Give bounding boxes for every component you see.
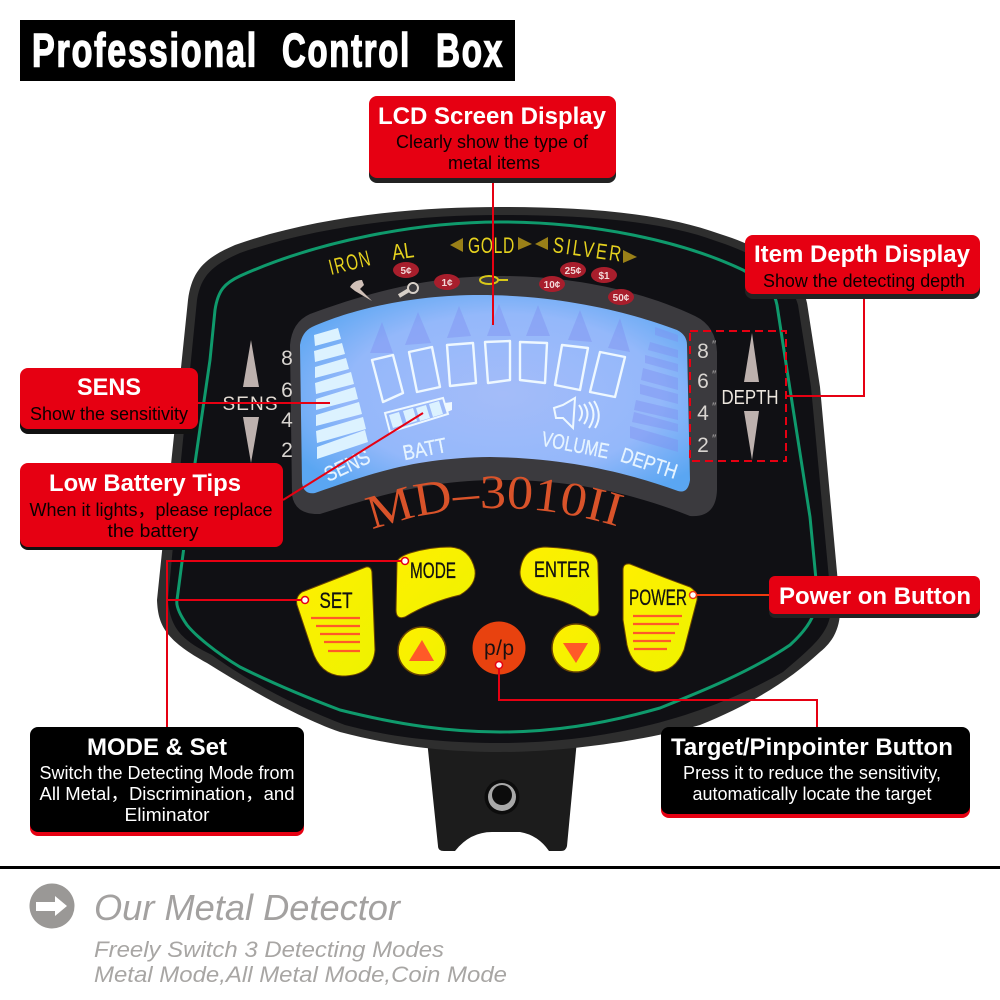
coin and item markers: 50¢	[613, 293, 630, 304]
sensitivity scale: 4	[281, 409, 293, 432]
screen labels: SENS	[321, 446, 374, 487]
callout: LCD screen display: LCD Screen Display	[378, 103, 607, 130]
handle mount with jack	[427, 740, 577, 851]
callout: LCD screen display: Clearly show the type of	[396, 132, 589, 152]
POWER button	[623, 564, 697, 672]
callout: target pinpointer button: Target/Pinpointer Button	[671, 734, 953, 761]
up arrow button	[398, 627, 446, 675]
depth scale	[697, 333, 778, 460]
callout: SENS: SENS	[77, 374, 141, 401]
coin and item markers	[350, 262, 634, 305]
SET button	[297, 567, 375, 676]
callout: SENS: Show the sensitivity	[30, 404, 188, 424]
brand labels above screen	[326, 232, 637, 280]
callout: mode and set: Switch the Detecting Mode from	[40, 763, 294, 783]
footer description: Freely Switch 3 Detecting Modes	[94, 937, 444, 962]
depth scale: ″	[712, 338, 717, 352]
sensitivity scale: 6	[281, 379, 293, 402]
callout: low battery tips: When it lights，please replace	[30, 500, 272, 520]
callout: item depth display: Item Depth Display	[754, 241, 971, 268]
callout: item depth display: Show the detecting depth	[763, 271, 965, 291]
callout: low battery tips: Low Battery Tips	[49, 470, 241, 497]
MODE button	[396, 547, 475, 618]
screen labels	[321, 428, 680, 487]
screen bezel	[290, 276, 717, 516]
icon: arrow in circle	[30, 884, 74, 928]
callout: power on button	[769, 576, 980, 618]
control box device	[157, 207, 840, 851]
callout: low battery tips	[20, 463, 283, 550]
coin and item markers: $1	[598, 271, 610, 282]
footer panel	[0, 866, 1000, 1000]
depth scale: 4	[697, 402, 709, 425]
title banner: Professional	[32, 24, 258, 76]
coin and item markers: 25¢	[565, 266, 582, 277]
model name: MD–3010II	[364, 476, 624, 529]
pinpoint button	[472, 622, 526, 674]
callout: target pinpointer button: automatically locate the target	[692, 784, 932, 804]
depth scale: ″	[712, 432, 717, 446]
brand labels above screen: IRON	[326, 245, 374, 280]
POWER button: POWER	[629, 585, 687, 610]
ghost segments	[370, 304, 678, 452]
sensitivity scale	[222, 340, 293, 463]
callout: power on button: Power on Button	[779, 583, 971, 610]
callout: mode and set: Eliminator	[124, 805, 210, 825]
callout: item depth display	[745, 235, 980, 299]
screen labels: VOLUME	[540, 428, 611, 463]
brand labels above screen: AL	[390, 237, 415, 265]
callout: LCD screen display	[369, 96, 616, 183]
coin and item markers: 10¢	[544, 280, 561, 291]
coin and item markers: 5¢	[400, 266, 412, 277]
footer description: Metal Mode,All Metal Mode,Coin Mode	[94, 962, 507, 987]
number digits	[372, 341, 625, 402]
callout leader lines	[167, 182, 864, 727]
callout: mode and set: All Metal，Discrimination，and	[40, 784, 294, 804]
callout: target pinpointer button: Press it to reduce the sensitivity,	[683, 763, 941, 783]
depth scale: ″	[712, 368, 717, 382]
LCD screen	[300, 295, 690, 493]
SET button: SET	[320, 588, 352, 613]
depth scale: ″	[712, 400, 717, 414]
sensitivity bars	[314, 328, 368, 459]
sensitivity scale: SENS	[222, 394, 278, 415]
callout: low battery tips: the battery	[108, 521, 198, 541]
callout: mode and set: MODE & Set	[87, 734, 227, 761]
callout: SENS	[20, 368, 198, 434]
callout: mode and set	[30, 727, 304, 836]
housing outer rim	[157, 207, 840, 752]
housing face	[168, 215, 831, 743]
MODE button: MODE	[410, 558, 456, 583]
footer description	[94, 937, 507, 987]
callout: target pinpointer button	[661, 727, 970, 818]
screen labels: DEPTH	[618, 444, 680, 484]
ENTER button	[520, 547, 599, 616]
ENTER button: ENTER	[534, 557, 590, 582]
callout: LCD screen display: metal items	[448, 153, 540, 173]
depth scale: 8	[697, 340, 709, 363]
title banner: Control	[282, 24, 411, 76]
buttons	[297, 547, 697, 676]
sensitivity scale: 2	[281, 439, 293, 462]
footer heading: Our Metal Detector	[94, 887, 402, 928]
sensitivity scale: 8	[281, 347, 293, 370]
coin and item markers: 1¢	[441, 278, 453, 289]
down arrow button	[552, 624, 600, 672]
title banner: Box	[436, 24, 504, 76]
green trim line	[177, 222, 817, 732]
speaker icon	[554, 398, 599, 428]
screen labels: BATT	[401, 434, 449, 465]
brand labels above screen: SILVER	[551, 232, 625, 267]
pinpoint button: p/p	[484, 637, 514, 660]
brand labels above screen: GOLD	[468, 233, 515, 258]
screen background	[300, 295, 690, 493]
title banner	[20, 20, 515, 81]
depth scale: DEPTH	[722, 387, 778, 409]
depth scale: 6	[697, 370, 709, 393]
depth scale: 2	[697, 434, 709, 457]
battery indicator	[385, 398, 452, 432]
